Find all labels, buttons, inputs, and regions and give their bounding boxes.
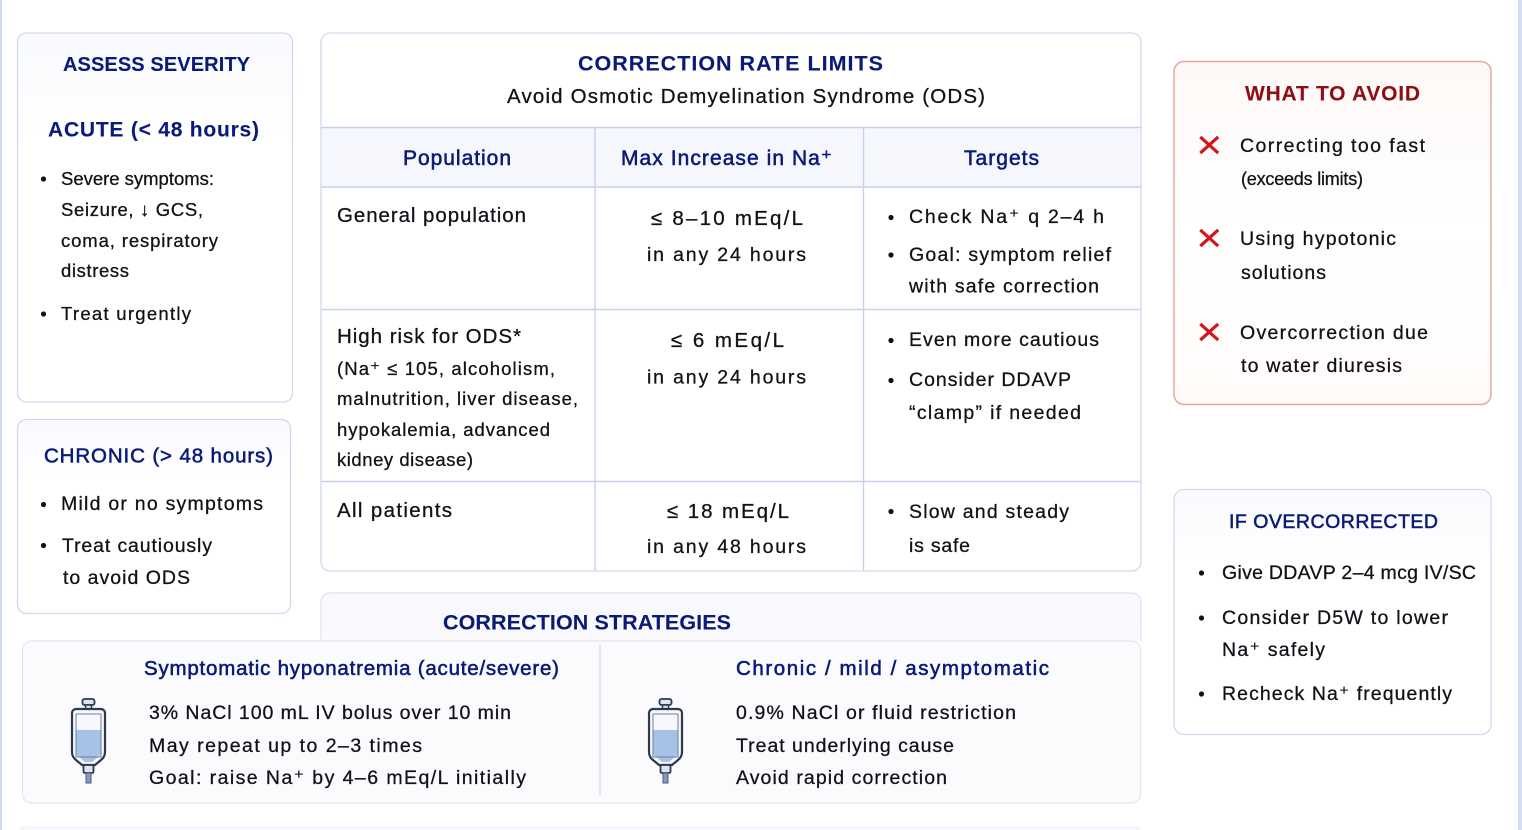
panel: correction strategies — [22, 593, 1141, 803]
subheading: avoid ODS: Avoid Osmotic Demyelination Syndrome (ODS) — [507, 85, 985, 108]
table header row — [322, 127, 1140, 187]
row: general population: with safe correction — [908, 276, 1099, 298]
acute bullet list: coma, respiratory — [61, 230, 219, 251]
row: high risk for ODS: (Na⁺ ≤ 105, alcoholism, — [337, 358, 555, 379]
heading: what to avoid: WHAT TO AVOID — [1245, 82, 1420, 106]
item: overcorrection: to water diuresis — [1241, 355, 1402, 377]
row: general population — [337, 204, 1112, 298]
row: high risk for ODS: “clamp” if needed — [909, 402, 1081, 424]
chronic bullet list: Treat cautiously — [62, 535, 212, 557]
subpanel: symptomatic: 3% NaCl 100 mL IV bolus over 10 min — [149, 702, 511, 724]
acute bullet list: Seizure, ↓ GCS, — [61, 199, 203, 220]
subpanel: chronic mild: Avoid rapid correction — [736, 767, 947, 789]
row: high risk for ODS: Even more cautious — [909, 329, 1099, 351]
overcorrected bullet list: Consider D5W to lower — [1222, 607, 1448, 629]
acute bullet list: distress — [61, 260, 129, 281]
row: high risk for ODS: in any 24 hours — [647, 366, 806, 388]
acute bullet list: Treat urgently — [61, 303, 192, 324]
subpanel: symptomatic: Goal: raise Na⁺ by 4–6 mEq/L initially — [149, 767, 526, 789]
row: general population: General population — [337, 204, 526, 227]
row: high risk for ODS: hypokalemia, advanced — [337, 419, 550, 440]
subpanel: symptomatic — [72, 657, 559, 789]
heading: correction rate limits: CORRECTION RATE LIMITS — [578, 52, 883, 76]
panel: assess severity acute — [18, 33, 292, 402]
heading: if overcorrected: IF OVERCORRECTED — [1229, 511, 1438, 533]
heading: chronic: CHRONIC (> 48 hours) — [44, 444, 273, 468]
heading: acute: ACUTE (< 48 hours) — [48, 118, 259, 142]
subpanel: chronic mild: 0.9% NaCl or fluid restriction — [736, 702, 1016, 724]
heading: correction strategies: CORRECTION STRATEGIES — [443, 610, 731, 634]
subpanel: chronic mild: Treat underlying cause — [736, 735, 954, 757]
table header row: Targets — [964, 147, 1039, 170]
acute bullet list — [41, 168, 219, 324]
row: high risk for ODS: High risk for ODS* — [337, 325, 521, 348]
chronic bullet list — [41, 493, 263, 589]
row: general population: Check Na⁺ q 2–4 h — [909, 206, 1104, 228]
row: general population: Goal: symptom relief — [909, 244, 1112, 266]
item: overcorrection — [1202, 322, 1428, 377]
overcorrected bullet list — [1199, 562, 1476, 705]
overcorrected bullet list: Give DDAVP 2–4 mcg IV/SC — [1222, 562, 1476, 584]
panel: if overcorrected — [1174, 490, 1491, 734]
row: high risk for ODS: malnutrition, liver disease, — [337, 388, 578, 409]
chronic bullet list: to avoid ODS — [63, 567, 190, 589]
subpanel: chronic mild — [649, 657, 1049, 789]
subpanel: symptomatic: May repeat up to 2–3 times — [149, 735, 422, 757]
icon: IV bag — [649, 699, 682, 783]
row: high risk for ODS: ≤ 6 mEq/L — [671, 329, 784, 352]
row: general population: ≤ 8–10 mEq/L — [651, 207, 803, 230]
overcorrected bullet list: Na⁺ safely — [1222, 639, 1325, 661]
item: correcting too fast: Correcting too fast — [1240, 135, 1426, 157]
chronic bullet list: Mild or no symptoms — [61, 493, 263, 515]
acute bullet list: Severe symptoms: — [61, 168, 214, 189]
row: all patients: Slow and steady — [909, 501, 1069, 523]
row: general population: in any 24 hours — [647, 244, 806, 266]
subpanel: symptomatic: Symptomatic hyponatremia (acute/severe) — [144, 657, 559, 680]
row: high risk for ODS: Consider DDAVP — [909, 369, 1071, 391]
row: all patients: in any 48 hours — [647, 536, 806, 558]
row: all patients: is safe — [909, 535, 970, 557]
row: all patients: ≤ 18 mEq/L — [667, 500, 789, 523]
row: all patients — [337, 499, 1069, 558]
table header row: Population — [403, 147, 511, 170]
panel: what to avoid — [1174, 62, 1491, 404]
icon: IV bag — [72, 699, 105, 783]
row: high risk for ODS — [337, 325, 1099, 470]
item: hypotonic solutions — [1202, 228, 1396, 284]
item: correcting too fast: (exceeds limits) — [1241, 169, 1363, 189]
table header row: Max Increase in Na⁺ — [621, 147, 832, 170]
panel: chronic — [18, 420, 290, 614]
item: overcorrection: Overcorrection due — [1240, 322, 1428, 344]
item: hypotonic solutions: Using hypotonic — [1240, 228, 1396, 250]
row: high risk for ODS: kidney disease) — [337, 449, 473, 470]
row: all patients: All patients — [337, 499, 452, 522]
overcorrected bullet list: Recheck Na⁺ frequently — [1222, 683, 1452, 705]
item: correcting too fast — [1202, 135, 1426, 189]
item: hypotonic solutions: solutions — [1241, 262, 1326, 284]
subpanel: chronic mild: Chronic / mild / asymptomatic — [736, 657, 1049, 680]
heading: assess severity: ASSESS SEVERITY — [63, 54, 251, 76]
panel: correction rate limits — [321, 33, 1141, 571]
